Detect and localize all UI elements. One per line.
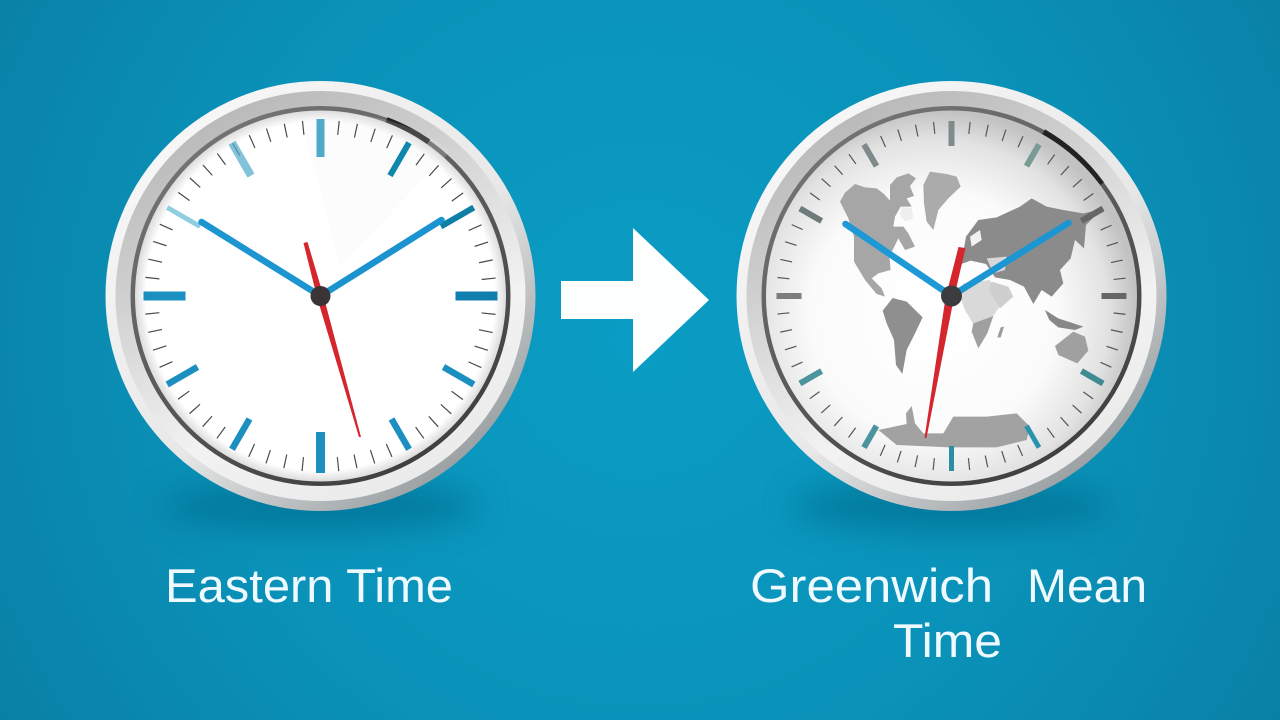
Greenland bbox=[923, 172, 961, 230]
Antarctica bbox=[878, 406, 1030, 447]
hour markers bbox=[776, 121, 1126, 471]
clock face bbox=[135, 110, 506, 482]
minute ticks bbox=[782, 127, 1120, 465]
Mediterranean cutout bbox=[987, 257, 1007, 273]
Southeast Asia islands bbox=[1045, 310, 1083, 330]
label: greenwich mean time: Greenwich bbox=[750, 559, 993, 612]
clock: eastern time bbox=[106, 81, 536, 532]
metal bezel bbox=[106, 81, 536, 511]
metal bezel bbox=[736, 81, 1166, 511]
label: eastern time: Eastern Time bbox=[165, 559, 453, 612]
Africa south bbox=[972, 316, 993, 348]
Hudson Bay bbox=[900, 207, 913, 222]
label: greenwich mean time: Time bbox=[893, 614, 1002, 667]
glass reflection bbox=[300, 114, 450, 266]
hour markers bbox=[144, 119, 498, 473]
hour hand bbox=[320, 220, 442, 296]
arrow bbox=[561, 228, 709, 372]
minute hand bbox=[202, 222, 320, 296]
clock shadow bbox=[160, 480, 480, 532]
label: greenwich mean time bbox=[750, 559, 1147, 667]
clock face bbox=[766, 110, 1137, 482]
North America bbox=[840, 173, 916, 297]
center pin bbox=[310, 286, 330, 306]
second hand bbox=[304, 242, 361, 437]
minute ticks bbox=[152, 127, 490, 465]
Africa north bbox=[960, 280, 1001, 324]
hour hand bbox=[952, 223, 1068, 296]
Madagascar bbox=[997, 327, 1004, 337]
clock shadow bbox=[792, 480, 1112, 532]
minute hand bbox=[846, 224, 952, 296]
center pin bbox=[941, 286, 962, 306]
clock: greenwich mean time bbox=[736, 81, 1166, 532]
second hand bbox=[924, 247, 966, 438]
label: greenwich mean time: Mean bbox=[1027, 559, 1147, 612]
world map bbox=[840, 172, 1102, 447]
Eurasia bbox=[961, 198, 1102, 304]
Australia bbox=[1055, 332, 1088, 363]
South America bbox=[883, 298, 923, 374]
Arabia bbox=[988, 282, 1013, 308]
Europe cutouts bbox=[970, 230, 982, 247]
